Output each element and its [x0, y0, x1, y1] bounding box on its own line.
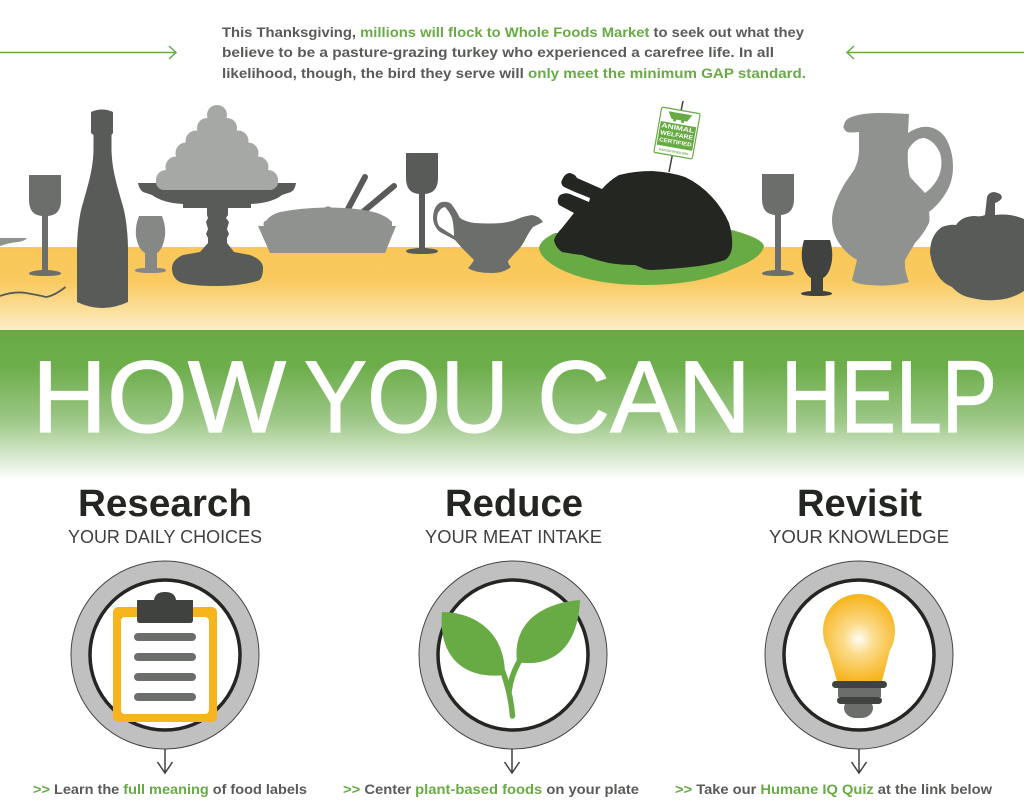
cord — [0, 287, 66, 297]
action text: >> Learn the full meaning of food labels — [33, 781, 307, 797]
ring — [419, 561, 607, 749]
wine glass 2 — [406, 153, 438, 254]
subheading: YOUR KNOWLEDGE — [769, 526, 949, 547]
wine glass 3 — [762, 174, 794, 276]
gravy boat — [433, 202, 543, 273]
turkey — [554, 171, 732, 270]
intro text: believe to be a pasture-grazing turkey who experienced a carefree life. In all — [222, 44, 774, 60]
bottle — [77, 110, 128, 308]
table top band — [0, 247, 1024, 330]
animal welfare sign: GAPCERTIFIED.ORG — [659, 147, 689, 156]
main heading — [32, 340, 997, 454]
intro text — [222, 24, 806, 81]
arrow down — [158, 749, 172, 773]
table scene — [0, 101, 1024, 308]
intro text: likelihood, though, the bird they serve will only meet the minimum GAP standard. — [222, 65, 806, 81]
cake — [156, 105, 278, 190]
pie dish — [258, 177, 396, 253]
intro text: This Thanksgiving, millions will flock to Whole Foods Market to seek out what they — [222, 24, 804, 40]
small glass — [135, 216, 166, 273]
main heading: CAN — [537, 340, 751, 454]
arrow: right, pointing left — [847, 46, 1024, 59]
column: revisit — [675, 483, 992, 797]
arrow down — [504, 749, 520, 773]
subheading: YOUR MEAT INTAKE — [425, 526, 602, 547]
green platter — [539, 230, 764, 285]
main heading: HOW — [32, 340, 286, 454]
jug — [832, 113, 953, 286]
plate edge at left — [0, 238, 27, 246]
heading: Reduce — [445, 483, 583, 525]
pumpkin — [930, 192, 1024, 300]
animal welfare sign: ANIMAL — [661, 122, 695, 135]
cake stand — [138, 183, 296, 286]
animal welfare sign: CERTIFIED — [658, 137, 692, 149]
action text: >> Take our Humane IQ Quiz at the link below — [675, 781, 992, 797]
arrow down — [852, 749, 866, 773]
arrow: left, pointing right — [0, 46, 176, 59]
icon: light bulb — [823, 594, 895, 718]
animal welfare sign — [654, 107, 700, 159]
action text: >> Center plant-based foods on your plate — [343, 781, 639, 797]
ring — [765, 561, 953, 749]
small dark glass — [801, 240, 832, 296]
ring — [71, 561, 259, 749]
heading: Revisit — [797, 483, 922, 525]
icon: clipboard — [113, 592, 217, 722]
main heading: YOU — [304, 340, 509, 454]
wine glass 1 — [29, 175, 61, 276]
column: research — [33, 483, 307, 797]
subheading: YOUR DAILY CHOICES — [68, 526, 262, 547]
animal welfare sign: WELFARE — [660, 130, 693, 142]
sign pole — [669, 101, 683, 172]
green banner — [0, 330, 1024, 480]
column: reduce — [343, 483, 639, 797]
icon: plant — [442, 600, 580, 716]
heading: Research — [78, 483, 252, 525]
